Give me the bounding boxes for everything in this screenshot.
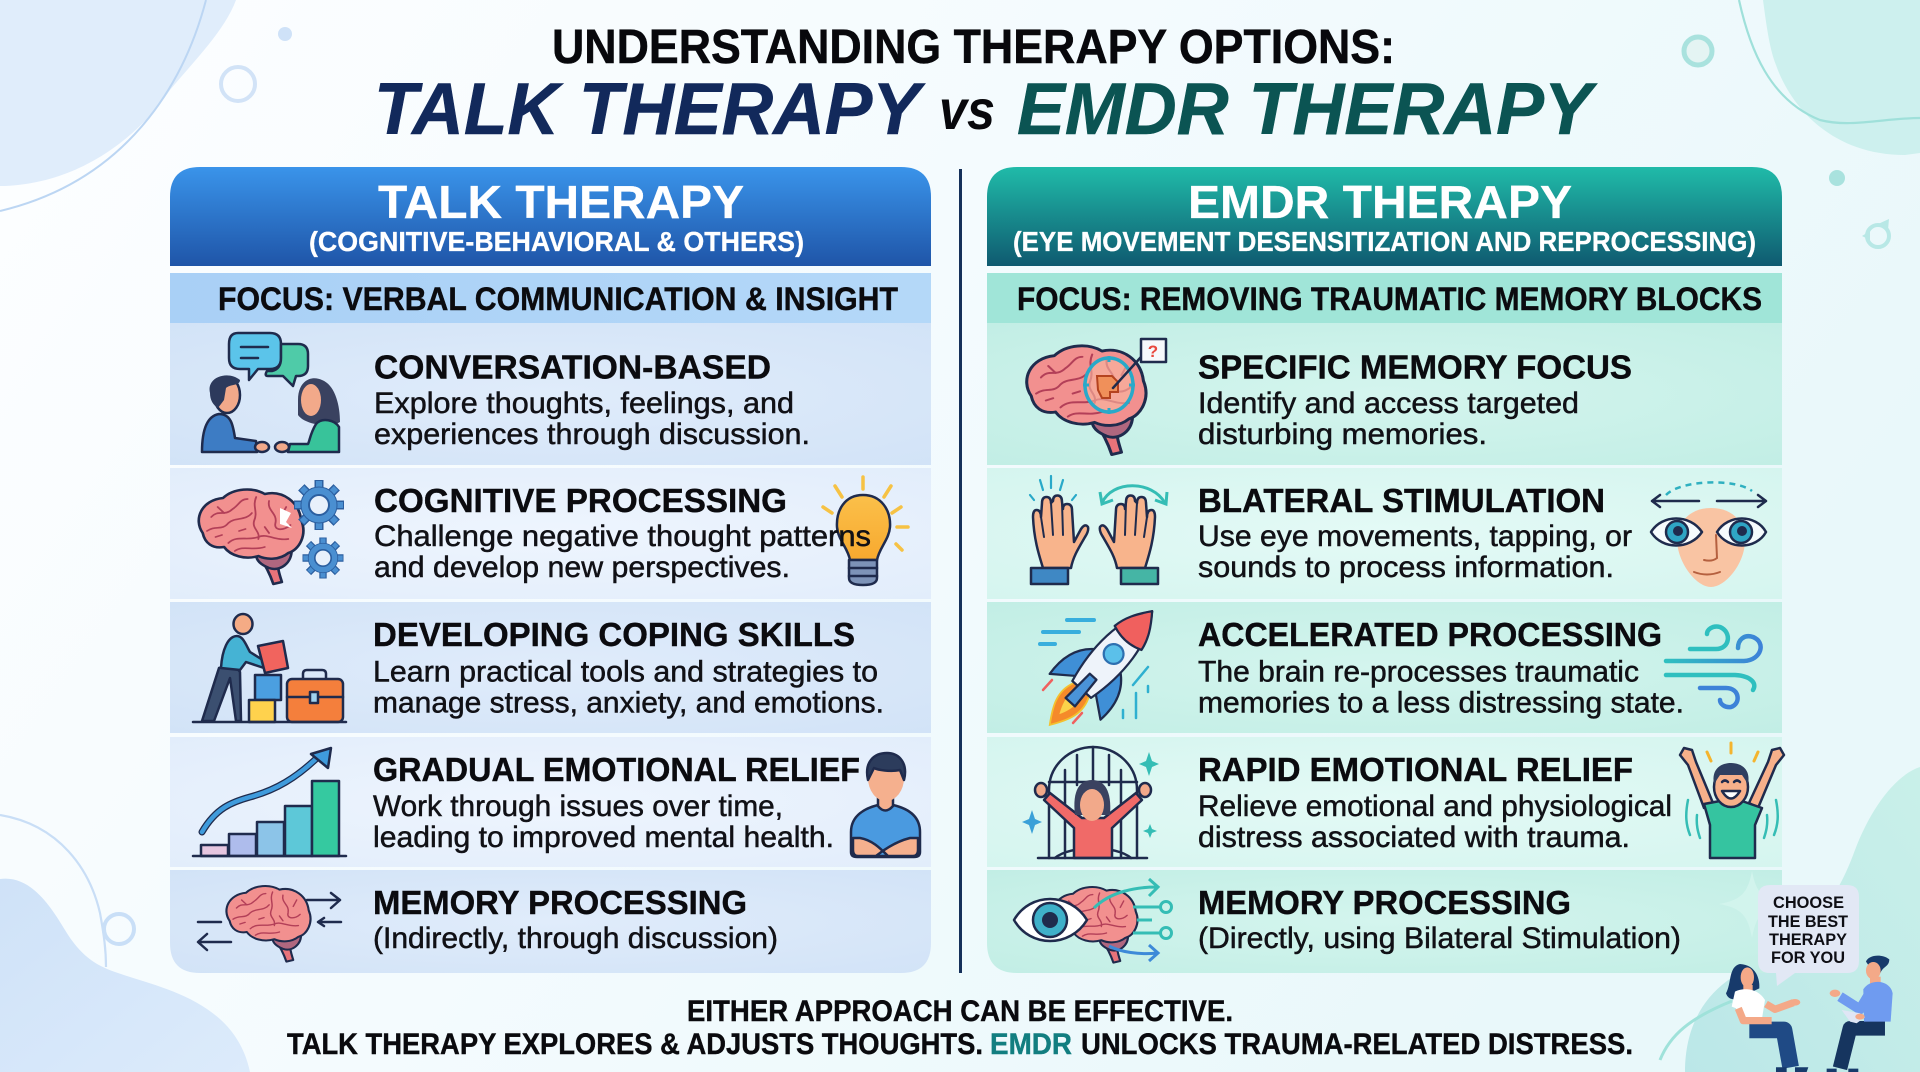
- speech bubble: choose the best therapy: [1758, 885, 1859, 986]
- title line 1: UNDERSTANDING THERAPY OPTIONS:: [552, 21, 1395, 74]
- speech bubble: choose the best therapy: CHOOSE: [1773, 893, 1844, 912]
- text: accelerated processing: [1198, 616, 1684, 720]
- row: bilateral stimulation: [987, 468, 1782, 599]
- text: memory processing (emdr): [1198, 884, 1681, 955]
- text: specific memory focus: [1198, 348, 1632, 451]
- text: conversation-based: CONVERSATION-BASED: [374, 348, 771, 386]
- text: cognitive processing: [374, 482, 871, 584]
- header: emdr therapy: (EYE MOVEMENT DESENSITIZATION AND REPROCESSING): [1013, 226, 1756, 257]
- decoration: bottom-left blob: [0, 815, 250, 1072]
- text: rapid emotional relief: [1198, 751, 1672, 854]
- focus band: emdr therapy: [987, 273, 1782, 323]
- row: rapid emotional relief: [987, 737, 1784, 867]
- header: talk therapy: [170, 167, 931, 266]
- focus band: talk therapy: FOCUS: VERBAL COMMUNICATION & INSIGHT: [218, 281, 898, 317]
- row: specific memory focus: [987, 323, 1782, 465]
- icon: happy man with raised arms: [1680, 743, 1784, 858]
- header: talk therapy: (COGNITIVE-BEHAVIORAL & OTHERS): [309, 226, 804, 257]
- text: memory processing (talk): [373, 884, 778, 955]
- icon: light bulb: [823, 477, 908, 585]
- text: gradual emotional relief: Work through issues over time,: [373, 790, 783, 823]
- text: developing coping skills: Learn practical tools and strategies to: [373, 656, 878, 688]
- text: developing coping skills: [373, 616, 884, 720]
- panel: emdr therapy: [987, 167, 1785, 973]
- text: conversation-based: Explore thoughts, feelings, and: [374, 387, 794, 420]
- text: memory processing (emdr): (Directly, using Bilateral Stimulation): [1198, 922, 1681, 955]
- icon: face with eyes moving: [1651, 482, 1766, 587]
- text: bilateral stimulation: sounds to process information.: [1198, 551, 1614, 584]
- panel: talk therapy: [170, 167, 931, 973]
- text: specific memory focus: SPECIFIC MEMORY FOCUS: [1198, 348, 1632, 386]
- illustration: two people in conversation: [1726, 956, 1893, 1072]
- text: specific memory focus: Identify and access targeted: [1198, 387, 1579, 420]
- text: accelerated processing: memories to a less distressing state.: [1198, 686, 1684, 720]
- row: conversation-based: [170, 323, 931, 465]
- center divider: [959, 169, 962, 973]
- icon: person with crossed arms: [851, 753, 920, 857]
- text: cognitive processing: Challenge negative thought patterns: [374, 520, 871, 553]
- icon: person stacking blocks with briefcase: [193, 614, 346, 722]
- speech bubble: choose the best therapy: FOR YOU: [1771, 948, 1845, 967]
- icon: brain with gears: [199, 480, 344, 584]
- title: talk therapy: TALK THERAPY: [374, 69, 926, 150]
- text: memory processing (emdr): MEMORY PROCESSING: [1198, 884, 1571, 921]
- footer line 1: EITHER APPROACH CAN BE EFFECTIVE.: [687, 995, 1233, 1028]
- icon: brain with target: ?: [1148, 342, 1158, 361]
- row: cognitive processing: [170, 468, 931, 599]
- text: rapid emotional relief: RAPID EMOTIONAL RELIEF: [1198, 751, 1633, 788]
- icon: wind swirls: [1666, 627, 1761, 707]
- text: accelerated processing: The brain re-processes traumatic: [1198, 656, 1639, 688]
- text: rapid emotional relief: distress associated with trauma.: [1198, 821, 1630, 854]
- decoration: bottom-right blob: [1660, 767, 1920, 1072]
- row: gradual emotional relief: [170, 737, 931, 867]
- text: gradual emotional relief: leading to improved mental health.: [373, 821, 834, 854]
- footer line 2: [287, 1028, 1633, 1061]
- text: gradual emotional relief: GRADUAL EMOTIONAL RELIEF: [373, 751, 860, 788]
- text: conversation-based: [374, 348, 810, 451]
- text: rapid emotional relief: Relieve emotional and physiological: [1198, 790, 1672, 823]
- decoration: top-left blob: [0, 0, 292, 211]
- text: gradual emotional relief: [373, 751, 860, 854]
- speech bubble: choose the best therapy: THERAPY: [1769, 930, 1848, 949]
- text: specific memory focus: disturbing memories.: [1198, 418, 1487, 451]
- footer: [287, 995, 1633, 1061]
- title: [374, 21, 1598, 150]
- footer line 2: UNLOCKS TRAUMA-RELATED DISTRESS.: [1081, 1028, 1633, 1061]
- icon: eye and brain with arrows: [1014, 879, 1172, 963]
- decoration: sparkle: [1719, 871, 1785, 938]
- text: conversation-based: experiences through discussion.: [374, 418, 810, 451]
- focus band: talk therapy: [170, 273, 931, 323]
- text: cognitive processing: and develop new perspectives.: [374, 551, 790, 584]
- speech bubble: choose the best therapy: THE BEST: [1768, 912, 1849, 931]
- icon: brain with target: [1027, 339, 1166, 455]
- row: accelerated processing: [987, 588, 1782, 748]
- footer line 2: TALK THERAPY EXPLORES & ADJUSTS THOUGHTS.: [287, 1028, 983, 1061]
- icon: tapping hands: [1030, 476, 1167, 584]
- header: emdr therapy: EMDR THERAPY: [1188, 176, 1572, 228]
- title: emdr therapy: EMDR THERAPY: [1017, 69, 1598, 150]
- focus band: emdr therapy: FOCUS: REMOVING TRAUMATIC MEMORY BLOCKS: [1017, 281, 1762, 317]
- text: developing coping skills: manage stress, anxiety, and emotions.: [373, 686, 884, 720]
- icon: brain with arrows: [198, 886, 341, 962]
- text: accelerated processing: ACCELERATED PROCESSING: [1198, 616, 1662, 653]
- header: emdr therapy: [987, 167, 1782, 266]
- icon: rocket: [1024, 588, 1178, 748]
- text: cognitive processing: COGNITIVE PROCESSING: [374, 482, 787, 519]
- text: bilateral stimulation: BLATERAL STIMULATION: [1198, 482, 1605, 519]
- text: memory processing (talk): (Indirectly, through discussion): [373, 922, 778, 955]
- footer line 2: EMDR: [990, 1028, 1072, 1061]
- text: developing coping skills: DEVELOPING COPING SKILLS: [373, 616, 855, 653]
- text: bilateral stimulation: Use eye movements, tapping, or: [1198, 520, 1632, 553]
- text: memory processing (talk): MEMORY PROCESSING: [373, 884, 747, 921]
- decoration: top-right blob: [1684, 0, 1920, 247]
- text: bilateral stimulation: [1198, 482, 1632, 584]
- icon: woman in open cage: [1022, 747, 1159, 858]
- icon: growth bar chart: [193, 748, 346, 856]
- header: talk therapy: TALK THERAPY: [378, 176, 744, 228]
- title: vs: vs: [939, 78, 995, 141]
- icon: two people talking: [202, 333, 340, 452]
- row: memory processing (emdr): [987, 870, 1785, 973]
- row: memory processing (talk): [170, 870, 931, 973]
- row: developing coping skills: [170, 602, 931, 733]
